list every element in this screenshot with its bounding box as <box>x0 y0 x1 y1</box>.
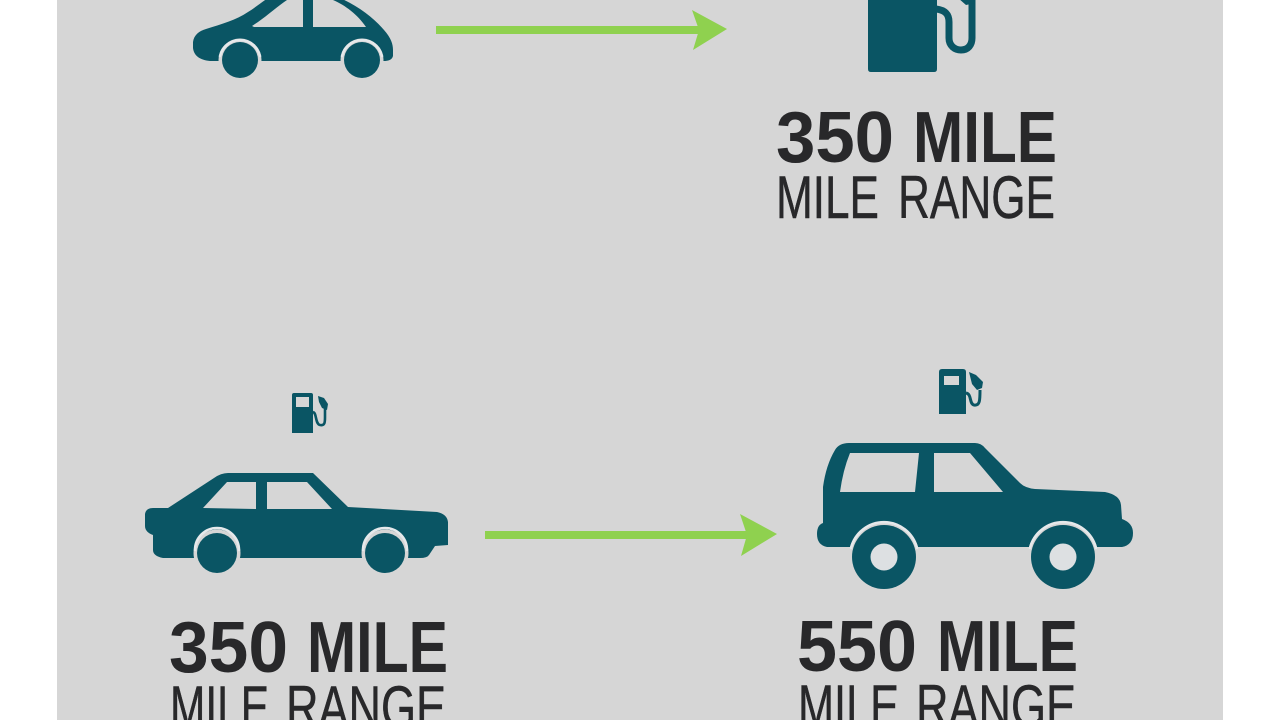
icon: larger fuel pump bottom right <box>939 369 983 414</box>
arrow: bottom green arrow <box>485 514 777 556</box>
text: mile range top <box>776 164 1055 231</box>
text: mile range top: MILE <box>776 164 879 231</box>
heading: 550 mile bottom <box>797 607 1078 687</box>
icon: large fuel pump top right <box>868 0 975 72</box>
icon: small hatchback car top left <box>193 0 393 82</box>
text: mile range bottom right <box>798 673 1076 720</box>
heading: 350 mile bottom <box>169 608 448 688</box>
text: mile range bottom left <box>170 674 446 720</box>
heading: 550 mile bottom: 550 <box>797 607 917 687</box>
heading: 350 mile top: 350 <box>776 98 894 178</box>
icon: SUV bottom right <box>817 443 1133 592</box>
heading: 550 mile bottom: MILE <box>937 607 1078 687</box>
heading: 350 mile bottom: 350 <box>169 608 288 688</box>
icon: sedan car bottom left <box>145 473 448 576</box>
heading: 350 mile top: MILE <box>913 98 1057 178</box>
text: mile range top: RANGE <box>898 164 1055 231</box>
heading: 350 mile top <box>776 98 1057 178</box>
heading: 350 mile bottom: MILE <box>307 608 448 688</box>
arrow: top green arrow <box>436 10 727 50</box>
icon: small fuel pump bottom left <box>292 393 328 433</box>
